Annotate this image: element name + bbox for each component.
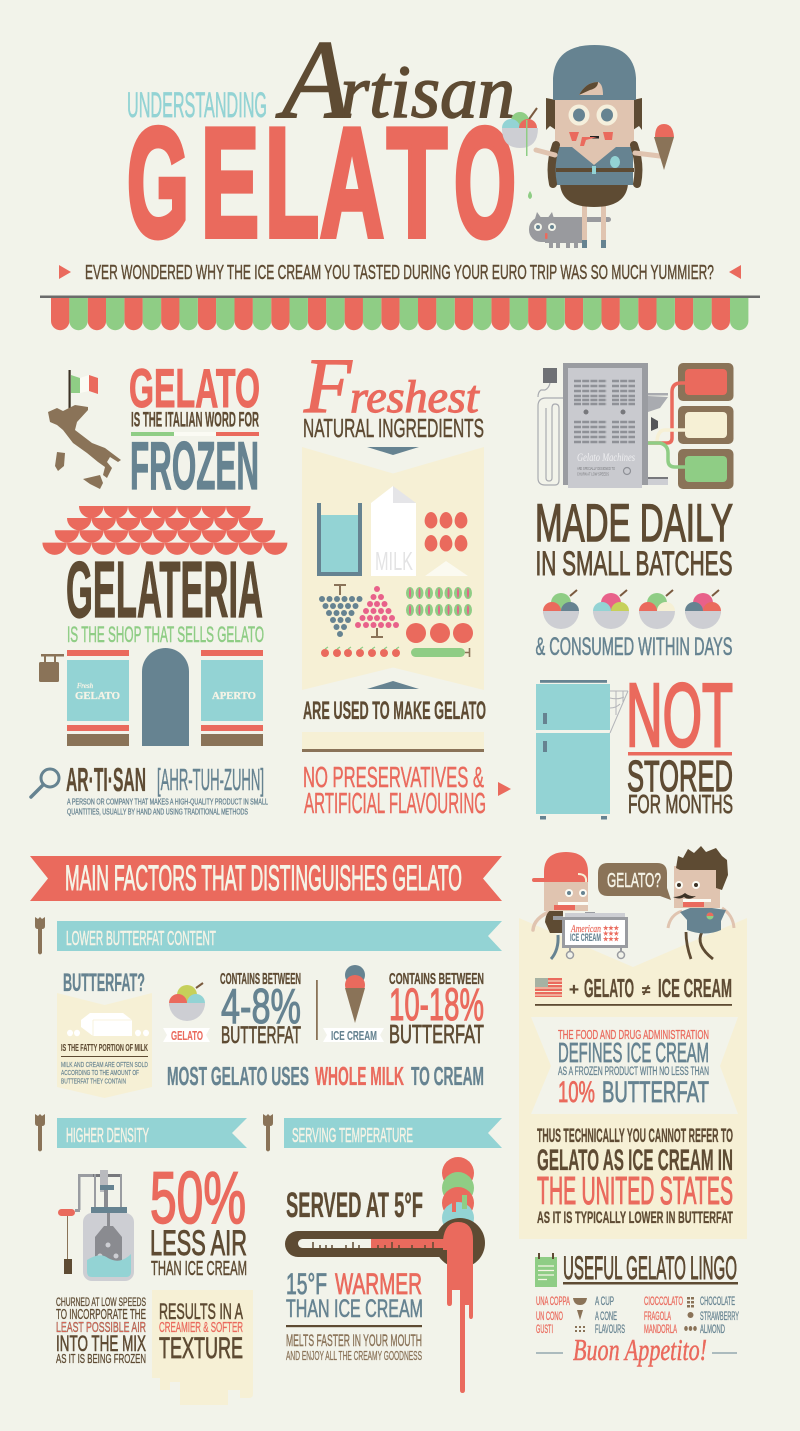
section ribbon: LOWER BUTTERFAT CONTENT: [66, 928, 216, 950]
script: buon appetito: Buon Appetito!: [573, 1332, 707, 1367]
bow panel: fda definition: 10%: [558, 1076, 595, 1109]
bow panel: fda definition: [531, 1017, 738, 1114]
equation: usa plus gelato not ice cream: ≠: [642, 982, 651, 999]
text: no preservatives: NO PRESERVATIVES &: [303, 762, 484, 794]
text: butterfat?: BUTTERFAT?: [63, 969, 145, 997]
bow panel: fda definition: BUTTERFAT: [602, 1076, 709, 1109]
stat: ice cream butterfat: 10-18%: [389, 979, 484, 1030]
text: than ice cream: THAN ICE CREAM: [151, 1258, 247, 1280]
text: churned explanation: LEAST POSSIBLE AIR: [56, 1320, 146, 1336]
text: 15f warmer: [286, 1268, 422, 1301]
icon: gelato machine: [538, 363, 668, 488]
glossary: italian terms: FRAGOLA: [644, 1309, 671, 1323]
equation: usa plus gelato not ice cream: GELATO: [584, 973, 634, 1003]
panel: serving temperature: [263, 1114, 502, 1393]
shop door: [142, 648, 189, 746]
character: american vendor: [532, 852, 588, 959]
text: [AHR-TUH-ZUHN]: [157, 762, 264, 797]
main title: gelato: L: [265, 96, 319, 269]
text: less air: LESS AIR: [150, 1224, 247, 1263]
text: no preservatives: [303, 762, 486, 820]
ingredients backing panel: [302, 447, 484, 690]
stat: ice cream butterfat: BUTTERFAT: [389, 1019, 484, 1049]
section ribbon: HIGHER DENSITY: [66, 1125, 149, 1147]
text: 15f warmer: 15°F: [286, 1268, 327, 1301]
icon: american ice cream cart: ★★★: [603, 925, 619, 932]
icons: four gelato bowls: [543, 590, 721, 629]
glossary: english terms: A CUP: [595, 1294, 614, 1308]
icon: gelato machine: Gelato Machines: [577, 450, 635, 464]
panel: gelateria shop: [39, 506, 287, 746]
icon: spoon: [263, 1114, 273, 1152]
banner: main factors: [30, 856, 502, 901]
glossary: italian terms: UN CONO: [536, 1309, 563, 1323]
icon: italy map with flag: [48, 370, 121, 489]
bowl in hand: [502, 108, 538, 199]
panel: dripping texture note: CREAMIER & SOFTER: [159, 1320, 243, 1336]
stat: ice cream butterfat: CONTAINS BETWEEN: [389, 971, 484, 988]
icon: eggs: [425, 512, 467, 552]
glossary: english terms: CHOCOLATE: [700, 1294, 735, 1308]
equation: usa plus gelato not ice cream: [535, 973, 732, 1006]
panel: butterfat explainer: MILK AND CREAM ARE OFTEN SOLD: [61, 1060, 148, 1069]
stat: gelato butterfat: BUTTERFAT: [221, 1022, 301, 1049]
tagline arrow left: [59, 265, 71, 279]
shop right window: APERTO: [212, 691, 256, 702]
icon: milk carton: MILK: [375, 546, 413, 576]
shop left window: GELATO: [75, 691, 120, 702]
section ribbon: [57, 1118, 247, 1148]
panel: artisan definition: AR·TI·SAN: [66, 761, 146, 798]
icon: shop sign: [39, 654, 64, 682]
icon: grapes: [319, 584, 362, 637]
definition: [67, 796, 268, 816]
equation: usa plus gelato not ice cream: +: [569, 980, 579, 999]
header: title block: [127, 18, 516, 269]
panel: lower butterfat content: CONTAINS BETWEEN: [220, 971, 301, 988]
script title: artisan: rtisan: [340, 51, 515, 134]
icon: oranges: [406, 623, 473, 643]
icon: american ice cream cart: [553, 912, 628, 958]
panel: butterfat explainer: IS THE FATTY PORTION OF MILK: [61, 1043, 148, 1054]
icon: pistachios: [406, 587, 472, 616]
text: served at 5f: SERVED AT 5°F: [286, 1186, 423, 1225]
script heading: freshest: F: [303, 342, 353, 429]
icon: notebook: [535, 1253, 557, 1287]
equation: usa plus gelato not ice cream: ICE CREAM: [658, 973, 732, 1003]
shop left window: [67, 650, 129, 746]
tricolour bar: [131, 432, 259, 436]
conclusion text: [537, 1126, 733, 1227]
icon: gelato machine: ARE SPECIALLY DESIGNED TO: [577, 466, 615, 471]
panel: gelato means frozen: [48, 357, 260, 504]
text: FROZEN: [130, 428, 259, 504]
panel: useful gelato lingo: [535, 1250, 739, 1367]
panel: artisan definition: [31, 761, 268, 816]
panel: dripping texture note: RESULTS IN A: [159, 1299, 243, 1324]
text: no preservatives: ARTIFICIAL FLAVOURING: [304, 788, 486, 820]
panel: butterfat explainer: BUTTERFAT THEY CONTAIN: [61, 1076, 126, 1086]
heading: natural ingredients: NATURAL INGREDIENTS: [303, 413, 484, 443]
icon: american ice cream cart: American: [570, 924, 601, 935]
section ribbon: [284, 1118, 502, 1148]
text: most gelato uses whole milk to cream: TO CREAM: [411, 1061, 484, 1091]
mascot: gelato eater with cat: [502, 45, 674, 248]
arrow: [498, 782, 511, 796]
awning: [40, 296, 760, 330]
glossary: italian terms: GUSTI: [536, 1322, 553, 1336]
text: churned explanation: TO INCORPORATE THE: [56, 1307, 146, 1323]
text: melts faster: MELTS FASTER IN YOUR MOUTH: [286, 1331, 422, 1350]
icon: american ice cream cart: ICE CREAM: [570, 932, 601, 944]
character: italian gelato maker: [668, 846, 734, 959]
text: churned explanation: [56, 1295, 146, 1366]
panel: not stored for months: [536, 666, 733, 820]
cone in hand: [654, 124, 674, 170]
text: IS THE ITALIAN WORD FOR: [131, 408, 259, 432]
icon: magnifier: [31, 769, 59, 797]
text: 15f warmer: WARMER: [335, 1268, 422, 1301]
main title: gelato: O: [454, 96, 516, 269]
icon: cherries: [321, 647, 400, 657]
icon: spoon: [35, 1114, 45, 1152]
script title: artisan: A: [275, 18, 351, 142]
icon: gelato bowl: GELATO: [171, 1028, 203, 1043]
panel: butterfat explainer: [57, 993, 152, 1098]
tagline arrow right: [729, 265, 741, 279]
main title: gelato: [127, 96, 516, 269]
divider block: [302, 732, 484, 752]
glossary: english terms: A CONE: [595, 1309, 617, 1323]
speech bubble: [598, 863, 671, 900]
icon: spoon: [35, 917, 45, 954]
glossary: english terms: ALMOND: [700, 1322, 725, 1336]
speech bubble: GELATO?: [607, 870, 661, 892]
main title: gelato: T: [387, 96, 447, 269]
stat: gelato butterfat: [220, 971, 301, 1049]
panel: higher density: [35, 1114, 253, 1405]
glossary: italian terms: [536, 1294, 683, 1336]
main title: gelato: A: [320, 96, 384, 269]
stat: ice cream butterfat: [389, 971, 484, 1049]
text: most gelato uses whole milk to cream: MOST GELATO USES: [167, 1061, 309, 1091]
panel: made daily: [535, 363, 734, 661]
glossary: english terms: [595, 1294, 739, 1336]
heading: gelato: GELATO: [129, 357, 260, 419]
tagline: [59, 261, 741, 284]
shop left window: Fresh: [76, 682, 94, 690]
script heading: freshest: reshest: [350, 371, 480, 422]
icon: milk carton: [371, 486, 416, 576]
glossary: english terms: FLAVOURS: [595, 1322, 625, 1336]
text: churned explanation: CHURNED AT LOW SPEEDS: [56, 1295, 146, 1309]
panel: useful gelato lingo: CIOCCOLATO: [644, 1294, 683, 1308]
icon: melting thermometer: [285, 1157, 485, 1393]
definition: A PERSON OR COMPANY THAT MAKES A HIGH-QUALITY PRODUCT IN SMALL: [67, 796, 268, 806]
roof tiles: [42, 506, 287, 555]
glossary: italian terms: MANDORLA: [644, 1322, 677, 1336]
main title: gelato: E: [201, 96, 259, 269]
text: are used to make gelato: ARE USED TO MAKE GELATO: [303, 697, 486, 725]
text: than ice cream: THAN ICE CREAM: [286, 1295, 423, 1323]
panel: dripping texture note: [152, 1290, 253, 1405]
definition: QUANTITIES, USUALLY BY HAND AND USING TRADITIONAL METHODS: [67, 806, 248, 816]
section ribbon: [57, 921, 502, 951]
text: churned explanation: AS IT IS BEING FROZEN: [56, 1351, 146, 1366]
heading: for months: FOR MONTHS: [628, 789, 733, 819]
icon: gelato machine: CHURN AT LOW SPEEDS: [577, 472, 609, 476]
text: STRAWBERRY: [700, 1309, 739, 1323]
icon: american ice cream cart: ★★★: [603, 936, 619, 943]
header: title block: UNDERSTANDING: [127, 86, 267, 125]
icon: vanilla pod: [411, 648, 470, 657]
stat: 50%: 50%: [150, 1158, 246, 1239]
icon: ice cream cone: [323, 965, 384, 1043]
panel: lower butterfat content: [35, 917, 502, 1098]
panel: freshest natural ingredients: [302, 342, 511, 820]
cat: [529, 212, 611, 248]
text: GELATERIA: [66, 545, 263, 634]
icon: churn jar: [58, 1170, 134, 1281]
icon: raspberries: [355, 586, 399, 638]
text: churned explanation: INTO THE MIX: [56, 1331, 146, 1356]
main title: gelato: G: [127, 96, 189, 269]
flavour tubs with pipes: [648, 363, 734, 489]
section ribbon: SERVING TEMPERATURE: [292, 1125, 413, 1147]
glossary: icons: [573, 1297, 697, 1332]
icon: sugar pile: [425, 561, 468, 576]
shop right window: [201, 650, 263, 746]
icon: glass of water: [317, 503, 362, 576]
icon: american ice cream cart: ★★★: [603, 930, 619, 938]
icon: gelato bowl: [163, 983, 210, 1043]
icon: fridge with cobweb: [536, 680, 628, 820]
panel: butterfat explainer: ACCORDING TO THE AMOUNT OF: [61, 1068, 139, 1077]
text: enjoy goodness: AND ENJOY ALL THE CREAMY GOODNESS: [286, 1348, 422, 1363]
text: most gelato uses whole milk to cream: WHOLE MILK: [315, 1061, 404, 1091]
glossary: italian terms: UNA COPPA: [536, 1294, 570, 1308]
stat: gelato butterfat: 4-8%: [221, 980, 301, 1034]
icon: ice cream cone: ICE CREAM: [331, 1028, 377, 1043]
text: is the shop that sells gelato: IS THE SHOP THAT SELLS GELATO: [67, 622, 264, 647]
panel: american gelato sidebar: [519, 846, 747, 1239]
panel: dripping texture note: TEXTURE: [159, 1332, 243, 1365]
